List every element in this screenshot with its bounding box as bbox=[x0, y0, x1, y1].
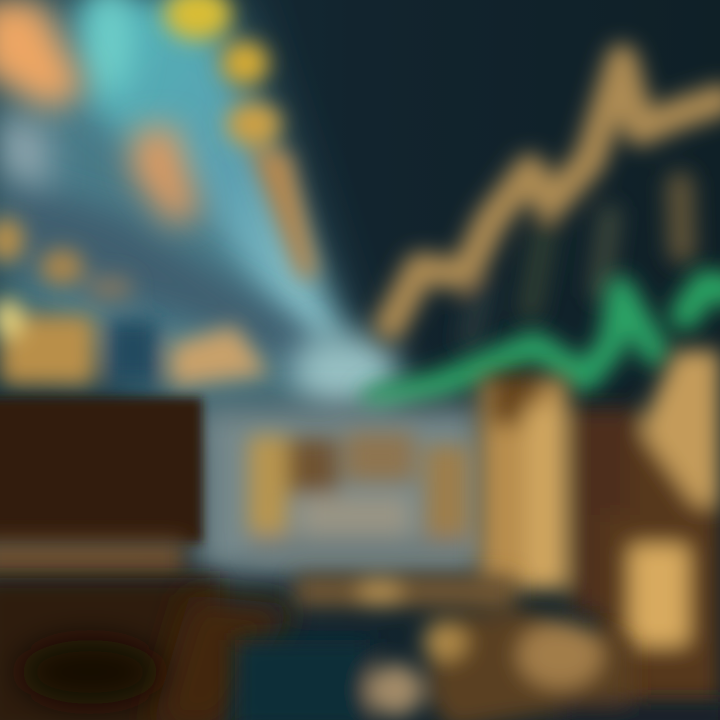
panel: bottom street with gold highlights bbox=[235, 575, 720, 720]
panel: green chart line bbox=[375, 285, 720, 400]
panel: rising gold line chart bbox=[390, 60, 720, 340]
panel: left gold windows bbox=[0, 218, 270, 388]
panel: dark brown desk foreground bbox=[0, 398, 295, 720]
panel: orange glow top left bbox=[0, 0, 200, 225]
panel: light beam sweeping from top left bbox=[0, 0, 400, 420]
icon: yellow lights descending bbox=[164, 0, 318, 280]
panel: central gold buildings bbox=[248, 432, 475, 560]
panel: hazy middle ground bbox=[195, 405, 485, 575]
panel: right gold towers bbox=[480, 350, 720, 710]
